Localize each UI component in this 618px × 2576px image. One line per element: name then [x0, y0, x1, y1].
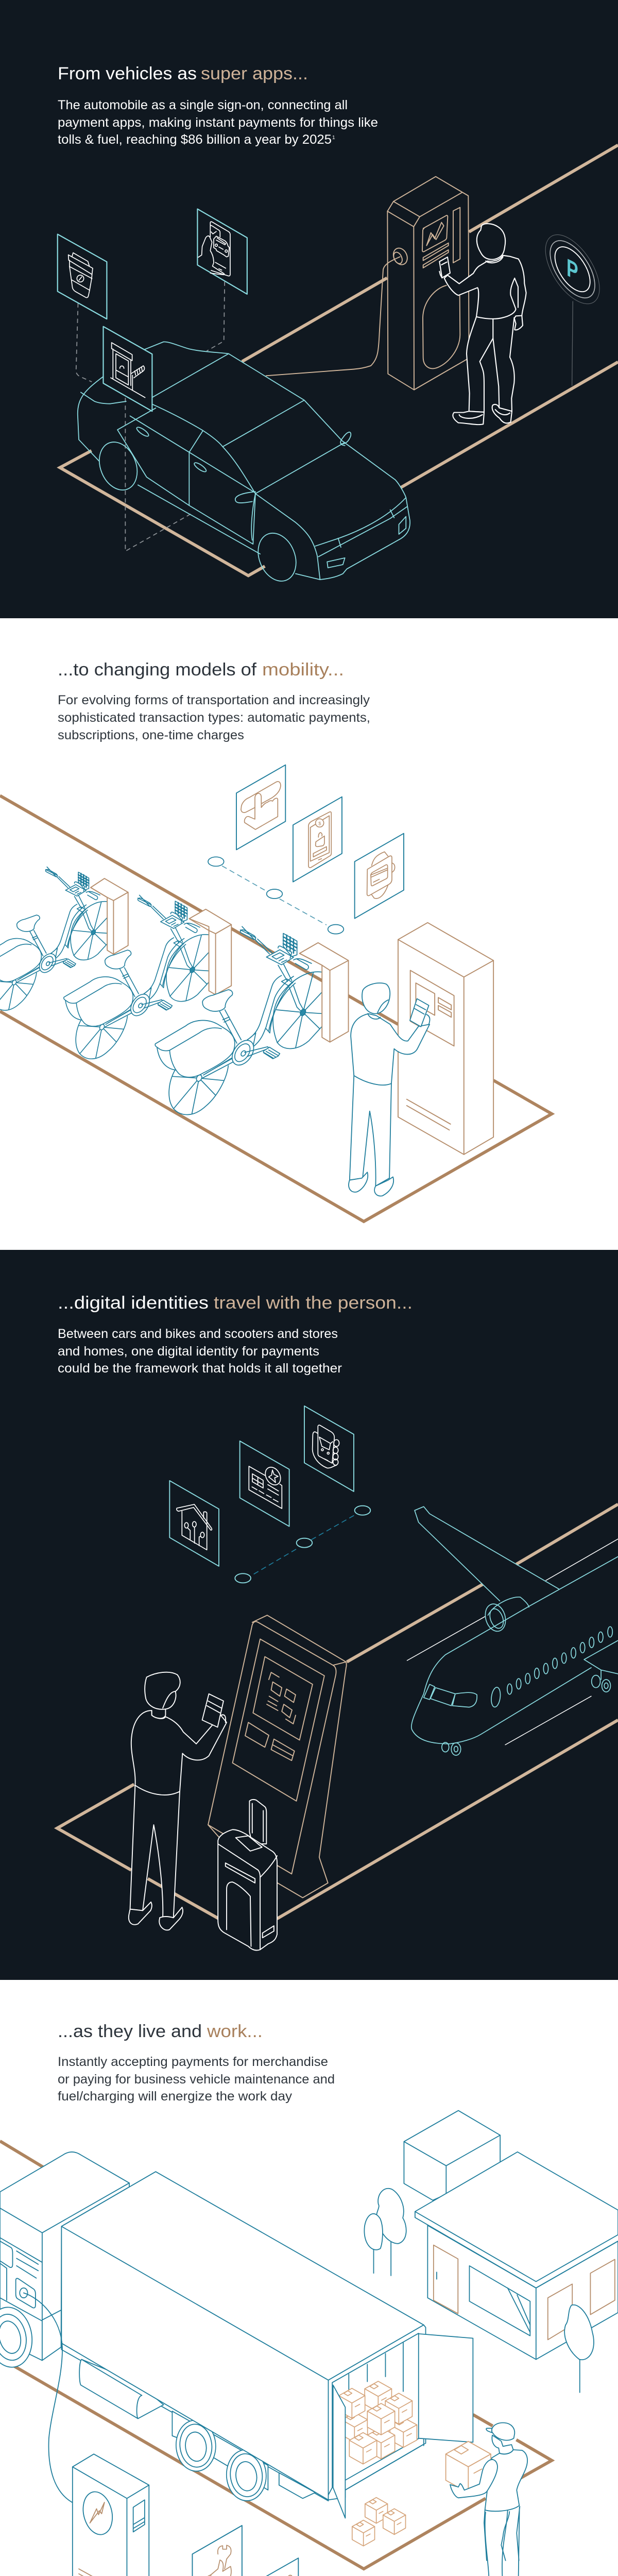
parking sign: P [566, 253, 578, 286]
charging station [266, 177, 469, 390]
heading: as they live and work [58, 2022, 263, 2041]
parking sign [535, 226, 610, 385]
panel: super apps section [0, 0, 618, 618]
icon: phone with lock [308, 812, 331, 868]
store building [415, 2152, 618, 2393]
text block: automobile as single sign-on [58, 98, 378, 147]
icon: loyalty card with star [249, 1464, 284, 1509]
truck cab [0, 2152, 129, 2377]
text block: one digital identity [58, 1327, 342, 1376]
heading: digital identities travel with the person: ...digital identities [58, 1293, 209, 1313]
truck doors [333, 2334, 473, 2518]
airplane [411, 1506, 618, 1755]
icons: smart home, loyalty card, mobile shopping [169, 1406, 370, 1583]
icon panels frames [58, 209, 247, 411]
runway lane markings [407, 1539, 618, 1745]
illustration: airport scene [57, 1504, 618, 1951]
dashed path with nodes [208, 857, 344, 934]
icon: car on phone [198, 222, 230, 276]
icon: coffee cup [68, 253, 93, 298]
dashed path with nodes [235, 1506, 370, 1583]
person at kiosk [349, 983, 430, 1196]
icon: smartwatch with card [367, 852, 395, 899]
icon frames [169, 1406, 354, 1566]
truck charger unit [73, 2454, 149, 2576]
delivery person lower body [472, 2507, 520, 2576]
icon: touch gesture [241, 782, 281, 829]
connector dashes [76, 282, 225, 551]
text block: accepting payments [58, 2055, 335, 2104]
icon: invoice [258, 2575, 293, 2576]
delivery person with box [446, 2422, 527, 2561]
text block: one digital identity: and homes, one digital identity for payments [58, 1344, 319, 1359]
illustration: ground outline [0, 795, 552, 1222]
panel: digital identities section [0, 1250, 618, 1980]
heading: as they live and work: work... [207, 2022, 263, 2041]
cargo boxes in truck and on floor [339, 2381, 417, 2546]
back building block [404, 2111, 500, 2200]
text block: one digital identity: could be the framework that holds it all together [58, 1361, 342, 1376]
heading: changing models of mobility [58, 660, 344, 680]
illustration: charger, person and parking sign [266, 177, 610, 425]
airport check-in kiosk [208, 1615, 347, 1897]
icon frames [192, 2526, 360, 2576]
traveller with phone [129, 1672, 227, 1930]
icon: thumbs up with wrench [203, 2545, 231, 2576]
heading: as they live and work: ...as they live and [58, 2022, 202, 2041]
bike 1 [0, 867, 108, 1010]
text block: automobile as single sign-on: tolls & fuel, reaching $86 billion a year by 2025 [58, 132, 332, 147]
parking bay ground outline [60, 145, 618, 575]
heading: digital identities travel with the person: travel with the person... [214, 1293, 413, 1313]
bike 3 [155, 926, 321, 1115]
trees [364, 2189, 406, 2276]
text block: evolving forms of transportation [58, 693, 370, 742]
text block: accepting payments: or paying for business vehicle maintenance and [58, 2072, 335, 2087]
heading: digital identities travel with the person [58, 1293, 413, 1313]
icons: thumbs up wrench, invoice, tools [164, 2526, 360, 2576]
truck trailer [61, 2172, 426, 2508]
ground outline [0, 2141, 552, 2569]
illustration: car at charger [58, 145, 618, 587]
icon: toll booth [111, 343, 145, 398]
text block: accepting payments: Instantly accepting payments for merchandise [58, 2055, 328, 2069]
icon: phone with lock: $ [318, 821, 321, 826]
text block: evolving forms of transportation: For evolving forms of transportation and increasingly [58, 693, 370, 707]
text block: automobile as single sign-on: payment apps, making instant payments for things like [58, 115, 378, 130]
panel: live and work section [0, 1980, 618, 2576]
stand 3 [300, 943, 349, 1042]
bike 2 [64, 895, 209, 1059]
text block: accepting payments: fuel/charging will energize the work day [58, 2089, 293, 2104]
text block: one digital identity: Between cars and bikes and scooters and stores [58, 1327, 338, 1341]
heading: from vehicles as super apps: super apps... [201, 64, 308, 83]
car outline [78, 342, 410, 587]
text block: automobile as single sign-on: 1 [332, 135, 335, 141]
runway ground outline [57, 1504, 618, 1919]
icon: shopping on phone [313, 1425, 339, 1468]
text block: automobile as single sign-on: The automobile as a single sign-on, connecting all [58, 98, 348, 112]
stand 2 [189, 909, 231, 995]
stand 1 [91, 878, 128, 954]
icons: coffee, car app, toll booth [68, 222, 230, 398]
suitcase [218, 1800, 277, 1951]
charging cable [24, 2293, 72, 2502]
text block: evolving forms of transportation: sophisticated transaction types: automatic payments, [58, 710, 370, 725]
heading: from vehicles as super apps [58, 64, 308, 83]
icon: smart home [177, 1504, 212, 1550]
icons: touch, phone lock, smartwatch [208, 765, 404, 934]
heading: from vehicles as super apps: From vehicles as [58, 64, 197, 83]
illustration: delivery truck scene [0, 2111, 618, 2569]
panel: changing models of mobility section [0, 618, 618, 1250]
payment kiosk [398, 923, 493, 1155]
heading: changing models of mobility: mobility... [262, 660, 344, 680]
person at charger [439, 224, 526, 425]
icon frames [236, 765, 404, 919]
text block: evolving forms of transportation: subscriptions, one-time charges [58, 728, 244, 742]
heading: changing models of mobility: ...to changing models of [58, 660, 257, 680]
truck doors and charger [24, 2293, 520, 2576]
